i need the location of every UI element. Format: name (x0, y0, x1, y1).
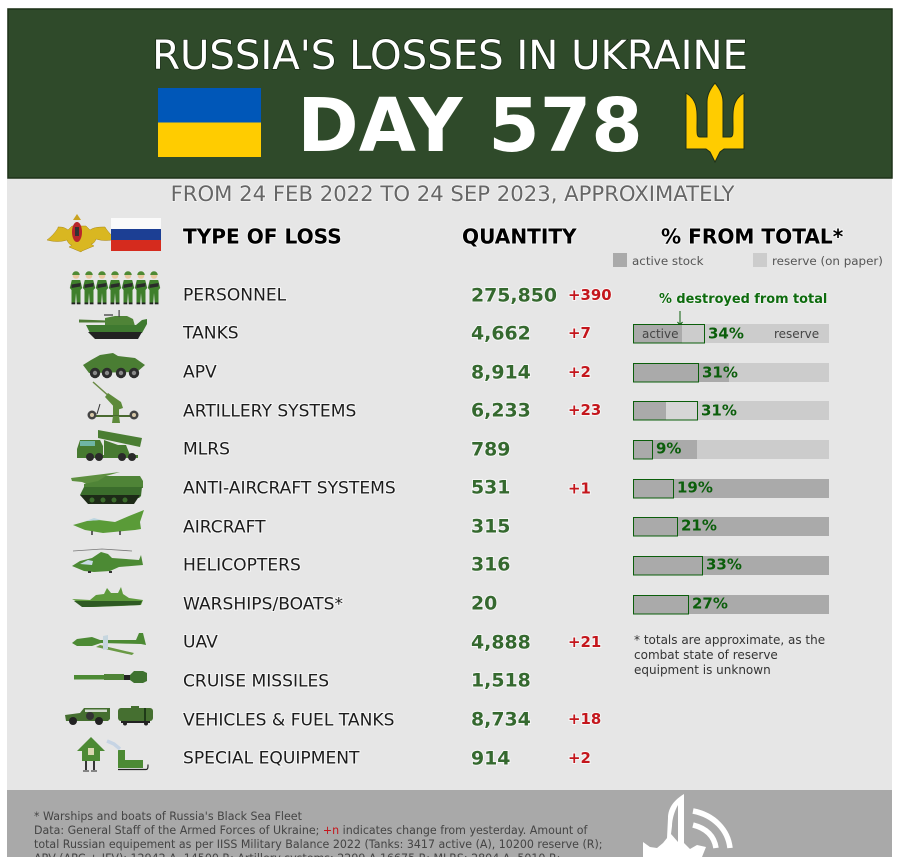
column heading: type of loss: TYPE OF LOSS (183, 224, 342, 248)
icon: armored vehicle (83, 353, 145, 378)
bar: tanks 34% (633, 324, 829, 343)
row: helicopters: HELICOPTERS (183, 555, 301, 575)
footnote: totals approximate: * totals are approximate, as the (634, 633, 825, 647)
row: aircraft (73, 510, 510, 537)
row: aircraft: 315 (471, 515, 510, 537)
panel: footer (7, 790, 892, 857)
icon: walking house (77, 737, 105, 771)
bar: anti-aircraft 19% (633, 478, 829, 498)
row: warships: WARSHIPS/BOATS* (183, 594, 343, 614)
source text: * Warships and boats of Russia's Black Sea Fleet (34, 810, 303, 823)
icon: fighter jet (73, 510, 144, 535)
row: MLRS: 789 (471, 438, 510, 460)
row: special equipment: +2 (568, 749, 591, 767)
row: tanks: TANKS (182, 323, 239, 343)
annotation: percent destroyed from total: % destroyed from total (659, 292, 827, 307)
legend: active stock: active stock (632, 254, 704, 268)
row: special equipment (77, 737, 591, 771)
bar: helicopters 33%: 33% (706, 556, 742, 574)
row: anti-aircraft: ANTI-AIRCRAFT SYSTEMS (183, 478, 396, 498)
icon: howitzer (88, 382, 138, 423)
row: special equipment: 914 (471, 747, 510, 769)
row: APV: 8,914 (471, 361, 531, 383)
row: UAV: UAV (183, 632, 218, 652)
row: UAV (72, 631, 601, 655)
footnote: totals approximate: combat state of reserve (634, 648, 778, 662)
footnote: totals approximate (634, 633, 825, 677)
row: personnel: 275,850 (471, 284, 557, 306)
row: tanks: 4,662 (471, 322, 531, 344)
bar: tanks 34%: 34% (708, 324, 744, 342)
bar: APV 31% (633, 363, 829, 382)
icon: anti-aircraft vehicle (71, 472, 143, 504)
icon: armored car (65, 708, 110, 725)
row: warships: 20 (471, 592, 497, 614)
row: vehicles and fuel tanks: VEHICLES & FUEL TANKS (183, 710, 394, 730)
panel: header banner (8, 9, 892, 178)
bar: anti-aircraft 19%: 19% (677, 478, 713, 496)
bar: aircraft 21% (633, 516, 829, 536)
row: helicopters (72, 549, 510, 575)
column heading: quantity: QUANTITY (462, 224, 577, 248)
row: MLRS: MLRS (183, 439, 230, 459)
bar: APV 31%: 31% (702, 364, 738, 382)
row: APV: +2 (568, 363, 591, 381)
row: personnel (70, 271, 612, 306)
row: artillery: ARTILLERY SYSTEMS (183, 401, 356, 421)
icon: trident (686, 83, 744, 162)
source text: Data: General Staff of the Armed Forces of Ukraine; +n indicates change from yesterday. Amount of (34, 824, 588, 837)
row: cruise missiles: CRUISE MISSILES (183, 671, 329, 691)
bar: MLRS 9% (633, 440, 829, 459)
row: vehicles and fuel tanks: 8,734 (471, 708, 531, 730)
row: special equipment: SPECIAL EQUIPMENT (183, 748, 360, 768)
row: UAV: +21 (568, 633, 601, 651)
icon: logo (643, 794, 730, 857)
row: tanks (79, 310, 591, 344)
bar: artillery 31% (633, 401, 829, 420)
row: artillery: +23 (568, 401, 601, 419)
row: aircraft: AIRCRAFT (183, 517, 266, 537)
row: vehicles and fuel tanks: +18 (568, 710, 601, 728)
column heading: percent from total: % FROM TOTAL* (661, 224, 844, 248)
icon: fuel tanker (118, 706, 153, 726)
icon: rocket launcher truck (77, 430, 142, 461)
row: anti-aircraft: +1 (568, 479, 591, 497)
row: personnel: +390 (568, 286, 612, 304)
footnote: totals approximate: equipment is unknown (634, 663, 771, 677)
bar: artillery 31%: 31% (701, 402, 737, 420)
bar: aircraft 21%: 21% (681, 516, 717, 534)
icon: helicopter (72, 549, 143, 572)
subtitle: FROM 24 FEB 2022 TO 24 SEP 2023, APPROXIMATELY (171, 181, 734, 206)
bar: MLRS 9%: 9% (656, 440, 681, 458)
bar: warships 27% (633, 594, 829, 614)
title: RUSSIA'S LOSSES IN UKRAINE (152, 33, 748, 79)
row: warships (72, 587, 497, 614)
icon: drone (72, 633, 146, 655)
bar: tanks 34%: reserve (774, 327, 819, 341)
row: artillery (88, 382, 601, 423)
row: anti-aircraft (71, 472, 591, 504)
row: artillery: 6,233 (471, 399, 531, 421)
row: tanks: +7 (568, 324, 591, 342)
icon: soldiers (70, 271, 160, 304)
row: helicopters: 316 (471, 553, 510, 575)
icon: tank (79, 310, 147, 339)
row: UAV: 4,888 (471, 631, 531, 653)
row: anti-aircraft: 531 (471, 476, 510, 498)
icon: Russian military emblem (47, 214, 116, 252)
row: APV: APV (183, 362, 217, 382)
row: MLRS (77, 430, 510, 461)
bar: helicopters 33% (633, 556, 829, 575)
icon: stove on sled (107, 741, 148, 770)
row: vehicles and fuel tanks (65, 706, 601, 730)
icon: Russian flag (111, 218, 161, 251)
annotation: percent destroyed from total (659, 292, 827, 325)
row: personnel: PERSONNEL (183, 285, 287, 305)
bar: warships 27%: 27% (692, 594, 728, 612)
legend: reserve: reserve (on paper) (772, 254, 883, 268)
icon: missile (74, 671, 147, 683)
source text (34, 810, 602, 857)
source text: total Russian equipement as per IISS Military Balance 2022 (Tanks: 3417 active (A), 10200 reserve (R); (34, 838, 602, 851)
icon: warship (72, 587, 143, 607)
icon: Ukraine flag (158, 88, 261, 157)
row: cruise missiles (74, 669, 531, 691)
row: APV (83, 353, 591, 383)
bar: tanks 34%: active (642, 327, 678, 341)
row: cruise missiles: 1,518 (471, 669, 531, 691)
day counter: DAY 578 (297, 83, 643, 169)
